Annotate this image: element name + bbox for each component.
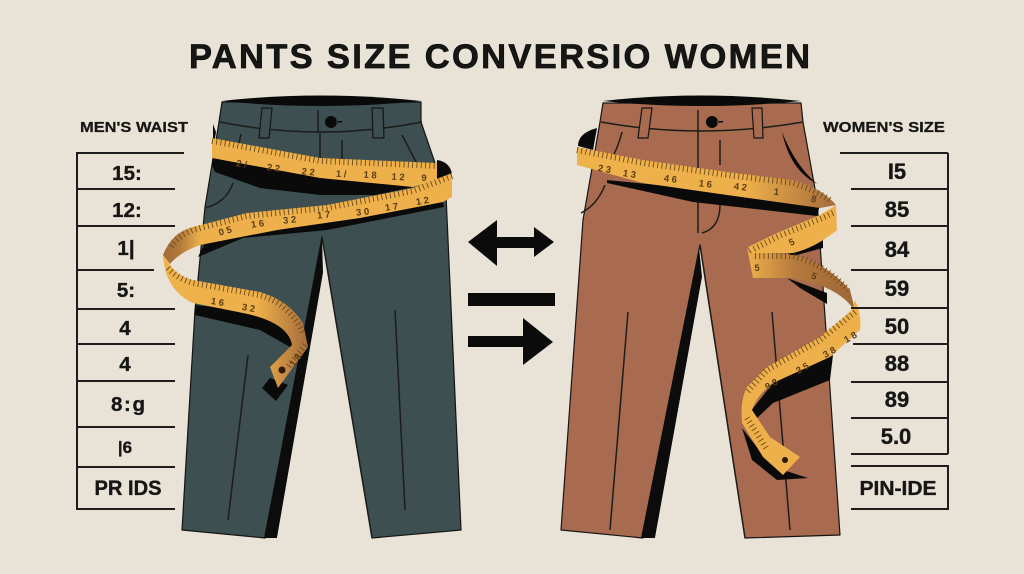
tape numbers: 3 5 bbox=[794, 360, 812, 377]
row values: 8:g bbox=[111, 393, 145, 416]
tape numbers: 3 0 bbox=[356, 206, 370, 219]
measuring tape: women's pants bbox=[577, 128, 860, 480]
tape segment: tail bbox=[163, 255, 308, 388]
tape numbers: 3 8 bbox=[821, 345, 838, 361]
waistband and details bbox=[205, 110, 422, 520]
measuring tape: men's pants bbox=[163, 124, 452, 401]
tape numbers: 5 bbox=[809, 271, 819, 283]
title: PANTS SIZE CONVERSIO WOMEN bbox=[189, 38, 810, 76]
right arrow bbox=[468, 318, 553, 365]
tape eyelet bbox=[782, 457, 788, 463]
row values: 15: bbox=[112, 162, 142, 185]
tape numbers: 2 3 bbox=[597, 163, 612, 176]
tape numbers: 4 2 bbox=[733, 181, 748, 194]
heading: men's waist: MEN'S WAIST bbox=[80, 120, 188, 136]
tape segment: mid bbox=[748, 205, 837, 254]
tape numbers: 2 2 bbox=[301, 166, 315, 179]
row values bbox=[860, 159, 936, 500]
row values: 89 bbox=[885, 387, 909, 412]
pocket crescent bbox=[782, 132, 817, 184]
right inseam line bbox=[322, 237, 372, 538]
row values: 12: bbox=[112, 199, 142, 222]
tape numbers: 3 2 bbox=[241, 302, 256, 315]
row values: 4 bbox=[119, 317, 131, 340]
row values: 85 bbox=[885, 197, 909, 222]
tape numbers: 3 2 bbox=[283, 214, 297, 227]
row values: PIN-IDE bbox=[860, 477, 936, 500]
illustration: men's pants bbox=[182, 96, 461, 538]
tape numbers: 1 3 bbox=[622, 168, 637, 181]
row values: PR IDS bbox=[94, 477, 162, 500]
tape numbers: 9 8 bbox=[763, 377, 780, 393]
row values bbox=[94, 162, 162, 500]
tape numbers: 1 6 bbox=[250, 218, 265, 231]
tape numbers: 1 2 bbox=[415, 195, 430, 208]
panel: women's size table bbox=[823, 120, 948, 509]
row values: 59 bbox=[885, 276, 909, 301]
tape segment: upper bbox=[577, 147, 836, 208]
row values: 5: bbox=[117, 279, 135, 302]
row values: 1| bbox=[117, 237, 135, 260]
waist opening bbox=[222, 96, 421, 106]
row values: 5.0 bbox=[881, 424, 911, 449]
table rules bbox=[840, 153, 948, 509]
tape shadows bbox=[578, 128, 833, 480]
waistband and details bbox=[581, 110, 803, 530]
double arrow bbox=[468, 220, 554, 266]
equals bar bbox=[468, 293, 555, 306]
row values: 84 bbox=[885, 237, 910, 262]
tape numbers: 1 7 bbox=[384, 201, 399, 214]
pants body bbox=[561, 103, 840, 538]
inseam background gap bbox=[655, 277, 745, 538]
illustration: women's pants bbox=[561, 96, 840, 538]
button bbox=[325, 116, 342, 128]
tape numbers: 1 6 bbox=[210, 296, 225, 309]
arrows bbox=[468, 220, 555, 365]
panel: men's waist table bbox=[76, 120, 188, 509]
tape numbers: 0 5 bbox=[218, 224, 234, 239]
tape segment: lower front bbox=[163, 173, 452, 264]
row values: |6 bbox=[118, 438, 132, 457]
tape ticks bbox=[577, 150, 830, 200]
tape segment: twist back bbox=[747, 248, 855, 310]
pants body bbox=[182, 102, 461, 538]
tape numbers: 1 8 bbox=[288, 352, 304, 369]
tape numbers: 1 2 bbox=[391, 172, 405, 183]
tape numbers: 1 8 bbox=[842, 330, 859, 346]
tape numbers: 1 8 bbox=[363, 170, 377, 181]
tape shadows bbox=[195, 124, 452, 401]
belt loops bbox=[259, 108, 384, 138]
heading: women's size: WOMEN'S SIZE bbox=[823, 120, 945, 136]
inner leg shadow bbox=[264, 237, 323, 538]
tape numbers: 2 / bbox=[235, 158, 248, 171]
row values: 4 bbox=[119, 353, 131, 376]
tape numbers bbox=[597, 163, 859, 393]
tape ticks bbox=[212, 141, 437, 166]
tape numbers: 1 / bbox=[336, 169, 347, 180]
tape numbers: 1 7 bbox=[317, 209, 331, 222]
tape numbers: 4 6 bbox=[663, 173, 678, 186]
button bbox=[706, 116, 723, 128]
tape numbers: 2 2 bbox=[266, 162, 281, 175]
tape numbers: 9 bbox=[421, 173, 427, 184]
tape numbers: 1 bbox=[773, 187, 780, 198]
table rules bbox=[76, 153, 184, 509]
row values: 50 bbox=[885, 314, 909, 339]
tape numbers: 8 bbox=[810, 194, 818, 206]
tape numbers bbox=[210, 158, 430, 369]
tape numbers: 5 bbox=[787, 236, 797, 249]
tape numbers: 1 6 bbox=[698, 178, 713, 191]
tape numbers: 5 bbox=[754, 263, 760, 274]
tape eyelet bbox=[278, 366, 286, 374]
belt loops bbox=[638, 108, 763, 138]
row values: I5 bbox=[888, 159, 906, 184]
row values: 88 bbox=[885, 351, 909, 376]
tape segment: upper back bbox=[212, 138, 437, 187]
waist opening bbox=[603, 96, 801, 106]
inner leg shadow bbox=[641, 247, 702, 538]
right inseam line bbox=[700, 245, 745, 538]
tape segment: tail bbox=[742, 300, 860, 475]
inseam background gap bbox=[277, 273, 372, 538]
